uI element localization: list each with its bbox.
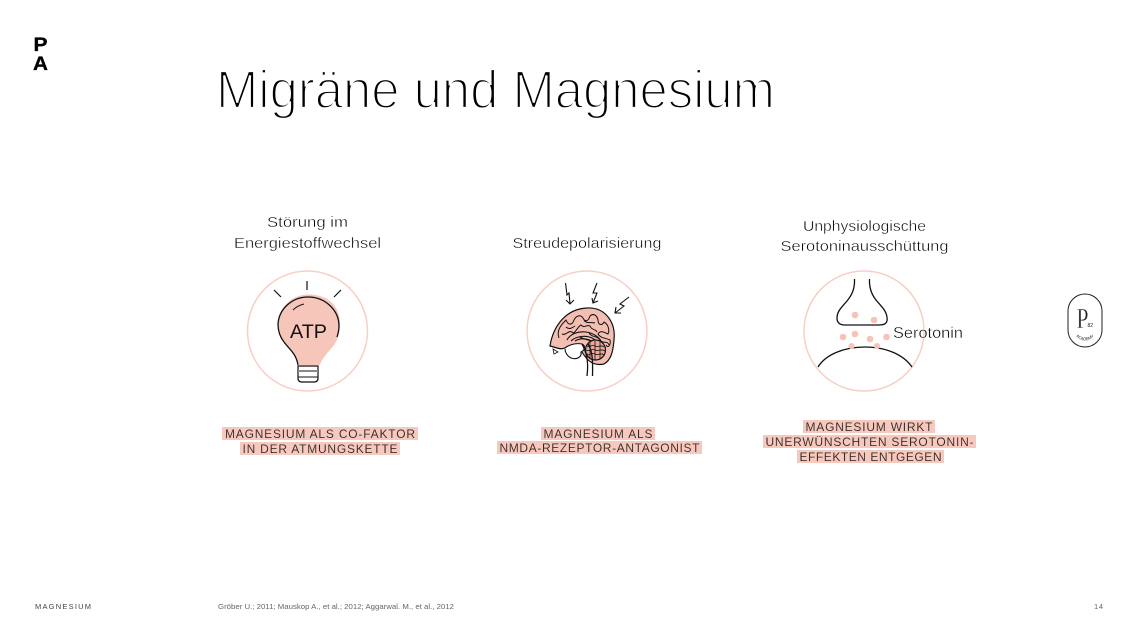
icon: light bulb with ATP [248,271,368,391]
caption: Serotonin-Effekte: MAGNESIUM WIRKT [806,420,933,434]
logo: PA monogram [33,35,48,75]
logo: P Academy badge: 82 [1088,323,1093,329]
title: Migräne und Magnesium [216,60,775,120]
icon: synapse with serotonin [804,271,963,391]
panel: Energiestoffwechsel [222,214,418,456]
logo: PA monogram: P [34,35,48,56]
footer: references: Gröber U.; 2011; Mauskop A., et al.; 2012; Aggarwal. M., et al., 2012 [218,602,454,611]
caption: Co-Faktor: IN DER ATMUNGSKETTE [242,442,398,456]
logo: PA monogram: A [33,54,48,75]
heading: Störung im Energiestoffwechsel: Energiestoffwechsel [234,235,381,252]
logo: P Academy badge [1068,294,1102,348]
icon: light bulb with ATP: ATP [290,322,327,343]
caption: Serotonin-Effekte: EFFEKTEN ENTGEGEN [800,450,942,464]
panel: Streudepolarisierung [497,235,702,455]
heading: Unphysiologische Serotoninausschüttung: Unphysiologische [803,218,926,235]
caption: Co-Faktor: MAGNESIUM ALS CO-FAKTOR [225,427,415,441]
caption: Co-Faktor [222,427,418,456]
logo: P Academy badge: ACADEMY [1076,334,1094,340]
icon: brain with lightning arrows [527,271,647,391]
footer: page number: 14 [1094,602,1103,611]
icon: synapse with serotonin: Serotonin [893,325,963,342]
caption: Serotonin-Effekte: UNERWÜNSCHTEN SEROTONIN- [766,435,974,449]
footer: section label: MAGNESIUM [35,602,91,611]
caption: NMDA: NMDA-REZEPTOR-ANTAGONIST [500,441,700,455]
panel: Serotonin [763,218,976,464]
heading: Streudepolarisierung: Streudepolarisierung [512,235,662,252]
caption: NMDA [497,427,702,455]
caption: Serotonin-Effekte [763,420,976,464]
caption: NMDA: MAGNESIUM ALS [544,427,652,441]
heading: Störung im Energiestoffwechsel [234,214,381,252]
heading: Störung im Energiestoffwechsel: Störung im [267,214,348,231]
heading: Unphysiologische Serotoninausschüttung [780,218,948,255]
heading: Unphysiologische Serotoninausschüttung: Serotoninausschüttung [780,238,948,255]
logo: P Academy badge: P [1076,303,1088,335]
